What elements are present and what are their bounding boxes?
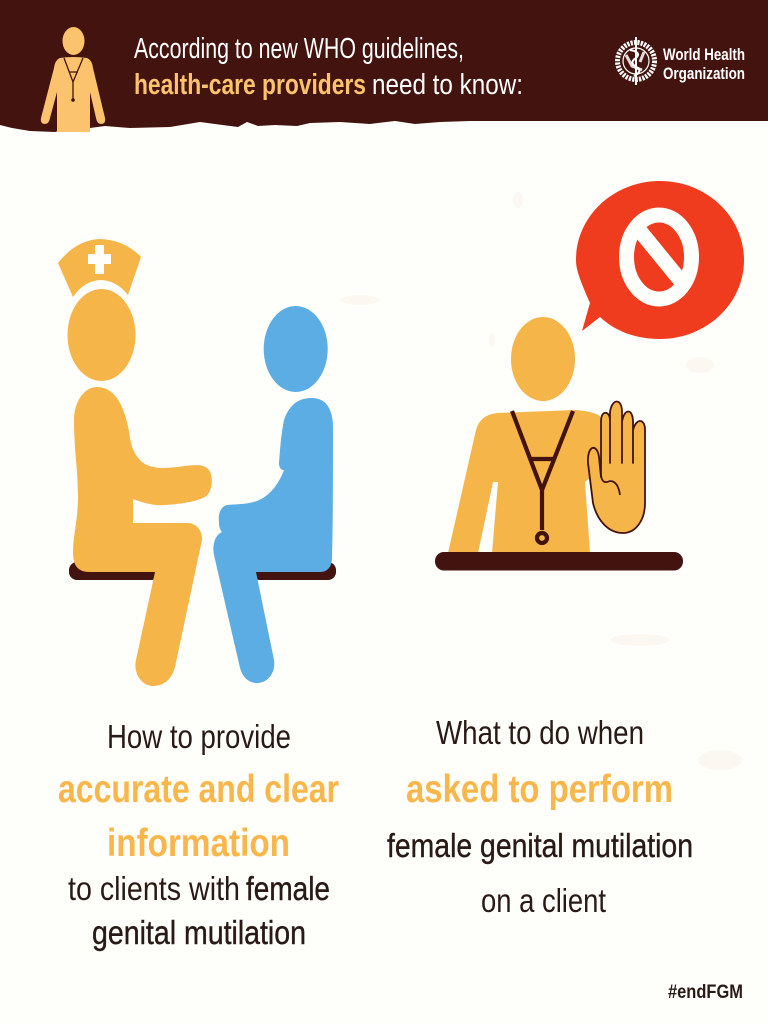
WHO wordmark: World Health [663,45,745,64]
WHO wordmark: Organization [663,64,745,83]
WHO wordmark [663,45,745,83]
stethoscope [512,411,573,543]
right caption: What to do when [436,714,644,751]
left caption: to clients with [68,870,240,907]
header title: need to know: [372,69,523,101]
illustration: provider refusing [435,181,744,570]
right caption: on a client [481,882,606,919]
left caption: genital mutilation [92,914,306,951]
header banner [0,0,768,132]
illustration: nurse and client seated [58,239,336,686]
seat bars [69,562,336,580]
left caption: female [246,870,330,907]
provider figure [448,317,600,553]
header title [134,33,523,101]
client figure [213,306,333,683]
table bar [435,552,683,570]
WHO logo [618,37,745,85]
right caption [387,714,693,919]
left caption [58,718,339,951]
header title: According to new WHO guidelines, [134,33,464,65]
right caption: asked to perform [406,768,673,811]
left caption: How to provide [107,718,291,755]
nurse figure [68,289,212,686]
icon: WHO emblem [618,37,654,85]
right caption: female genital mutilation [387,827,693,864]
header title: health-care providers [134,69,366,101]
left caption: information [107,822,290,865]
icon: health-care provider [41,27,105,132]
nurse cap [58,239,141,297]
palm crease [601,475,620,495]
hashtag: #endFGM [668,982,743,1003]
left caption: accurate and clear [58,768,339,811]
raised hand [588,402,645,533]
speech bubble with prohibition sign [576,181,744,339]
